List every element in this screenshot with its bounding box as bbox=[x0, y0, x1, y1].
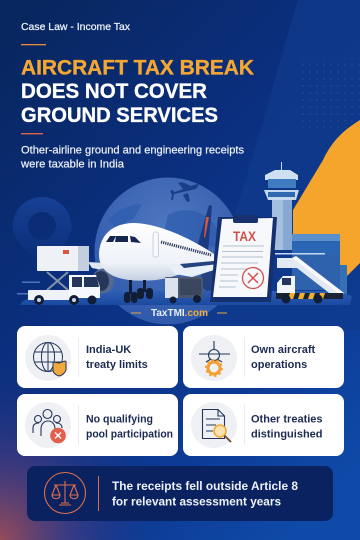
brand: TaxTMI.com: TaxTMI.com bbox=[151, 308, 208, 319]
card: India-UK treaty limits: India-UK bbox=[86, 344, 131, 356]
icon: people with cross bbox=[33, 410, 62, 436]
header label: Case Law - Income Tax bbox=[21, 21, 131, 33]
cockpit windows bbox=[106, 236, 141, 243]
ground bbox=[20, 291, 352, 305]
main wing bbox=[168, 262, 214, 277]
conclusion banner: for relevant assessment years bbox=[112, 495, 281, 509]
icon: ghost location pin bbox=[12, 197, 72, 264]
accent rule: top bbox=[21, 44, 46, 45]
subtitle: were taxable in India bbox=[20, 159, 125, 171]
card: No qualifying pool participation: No qualifying bbox=[86, 414, 153, 426]
airport illustration bbox=[12, 162, 352, 324]
card: No qualifying pool participation: pool participation bbox=[86, 429, 173, 441]
globe landmass bbox=[108, 204, 218, 255]
card: Other treaties distinguished: Other treaties bbox=[251, 414, 323, 426]
ground power unit bbox=[165, 277, 203, 304]
terminal building bbox=[275, 234, 347, 294]
cabin door bbox=[153, 232, 158, 257]
card: No qualifying pool participation bbox=[17, 394, 178, 456]
globe bbox=[94, 178, 242, 324]
card: Other treaties distinguished bbox=[183, 394, 344, 456]
card: Own aircraft operations bbox=[183, 326, 344, 388]
icon: scales of justice bbox=[44, 472, 86, 514]
card: Own aircraft operations: Own aircraft bbox=[251, 344, 316, 356]
engine right bbox=[201, 267, 215, 291]
card: Other treaties distinguished: distinguished bbox=[251, 429, 322, 441]
icon: aircraft with gear bbox=[199, 341, 230, 362]
air stairs truck bbox=[276, 256, 344, 304]
conclusion banner bbox=[27, 466, 333, 521]
landing gear bbox=[124, 280, 153, 303]
card: Own aircraft operations: operations bbox=[251, 359, 307, 371]
accent rule: title bbox=[21, 133, 43, 134]
clipboard: tax document bbox=[210, 215, 277, 302]
icon: document with magnifier bbox=[202, 410, 224, 438]
aircraft bbox=[88, 205, 215, 303]
card: India-UK treaty limits: treaty limits bbox=[86, 359, 148, 371]
orange corner shape bbox=[293, 120, 360, 276]
brand: TaxTMI.com bbox=[131, 308, 227, 319]
tail fin bbox=[197, 205, 212, 252]
subtitle bbox=[20, 144, 245, 171]
icon: small plane bbox=[170, 182, 199, 202]
title: DOES NOT COVER bbox=[21, 79, 207, 103]
control tower bbox=[264, 162, 299, 250]
title: GROUND SERVICES bbox=[21, 103, 218, 127]
title: AIRCRAFT TAX BREAK bbox=[21, 56, 254, 80]
clipboard: tax document: TAX bbox=[233, 228, 257, 244]
conclusion banner: The receipts fell outside Article 8 bbox=[112, 479, 298, 493]
far wing bbox=[88, 262, 112, 272]
subtitle: Other-airline ground and engineering receipts bbox=[21, 144, 245, 156]
icon: globe with shield bbox=[34, 342, 66, 376]
engine left bbox=[92, 268, 114, 294]
fuselage bbox=[99, 223, 214, 281]
card: India-UK treaty limits bbox=[17, 326, 178, 388]
icon: gear bbox=[206, 360, 222, 376]
title bbox=[21, 56, 254, 127]
cargo loader truck bbox=[28, 246, 100, 305]
cabin windows bbox=[161, 242, 211, 255]
